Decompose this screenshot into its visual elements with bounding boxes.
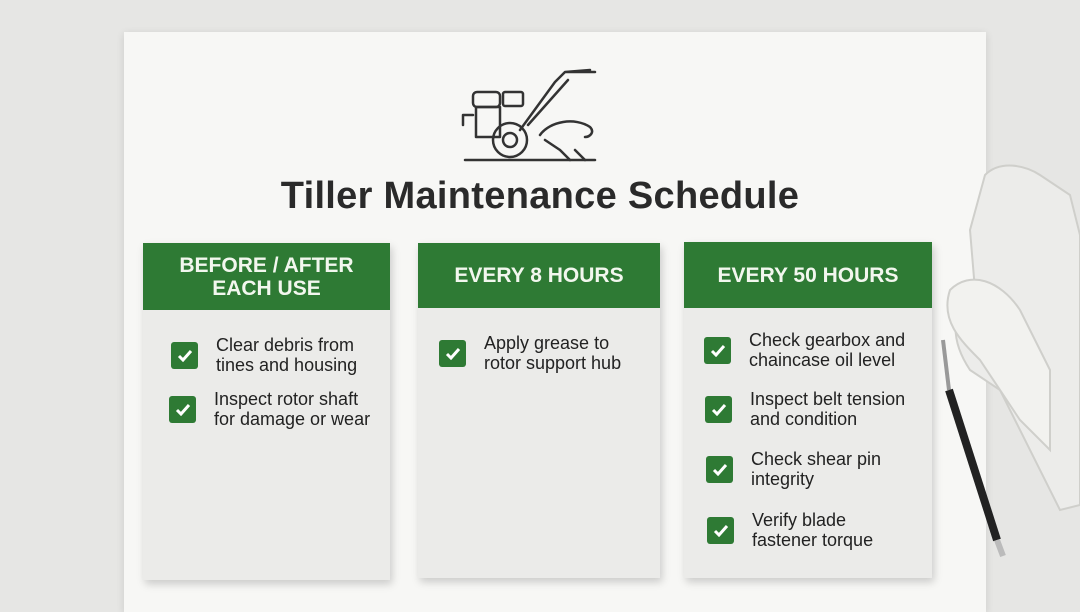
item 2: Inspect rotor shaft xyxy=(214,389,358,409)
item 1: Clear debris from xyxy=(216,335,354,355)
heading: BEFORE / AFTER xyxy=(179,254,354,276)
heading xyxy=(684,242,932,308)
item 3 xyxy=(706,449,881,489)
item 1: chaincase oil level xyxy=(749,350,895,370)
item 1 xyxy=(171,335,357,375)
panel: before/after each use xyxy=(143,243,390,580)
title: Tiller Maintenance Schedule xyxy=(281,175,799,217)
paper sheet xyxy=(124,32,986,612)
item 4: fastener torque xyxy=(752,530,873,550)
item: Apply grease to xyxy=(484,333,609,353)
item 2: Inspect belt tension xyxy=(750,389,905,409)
panel: every 8 hours xyxy=(418,243,660,578)
item: rotor support hub xyxy=(484,353,621,373)
heading: EVERY 8 HOURS xyxy=(454,264,624,287)
item 3: integrity xyxy=(751,469,814,489)
item 2: for damage or wear xyxy=(214,409,370,429)
item 4 xyxy=(707,510,873,550)
heading: EVERY 50 HOURS xyxy=(718,264,898,286)
gloves xyxy=(946,164,1080,511)
pencil xyxy=(941,340,1006,557)
panel: every 50 hours xyxy=(684,242,932,578)
item xyxy=(439,333,621,373)
item 2: and condition xyxy=(750,409,857,429)
item 3: Check shear pin xyxy=(751,449,881,469)
item 1: tines and housing xyxy=(216,355,357,375)
heading xyxy=(418,243,660,308)
heading: EACH USE xyxy=(212,276,321,300)
item 1: Check gearbox and xyxy=(749,330,905,350)
item 4: Verify blade xyxy=(752,510,846,530)
heading xyxy=(143,243,390,310)
item 2 xyxy=(169,389,370,429)
icon: tiller xyxy=(462,68,596,162)
item 2 xyxy=(705,389,905,429)
item 1 xyxy=(704,330,905,370)
